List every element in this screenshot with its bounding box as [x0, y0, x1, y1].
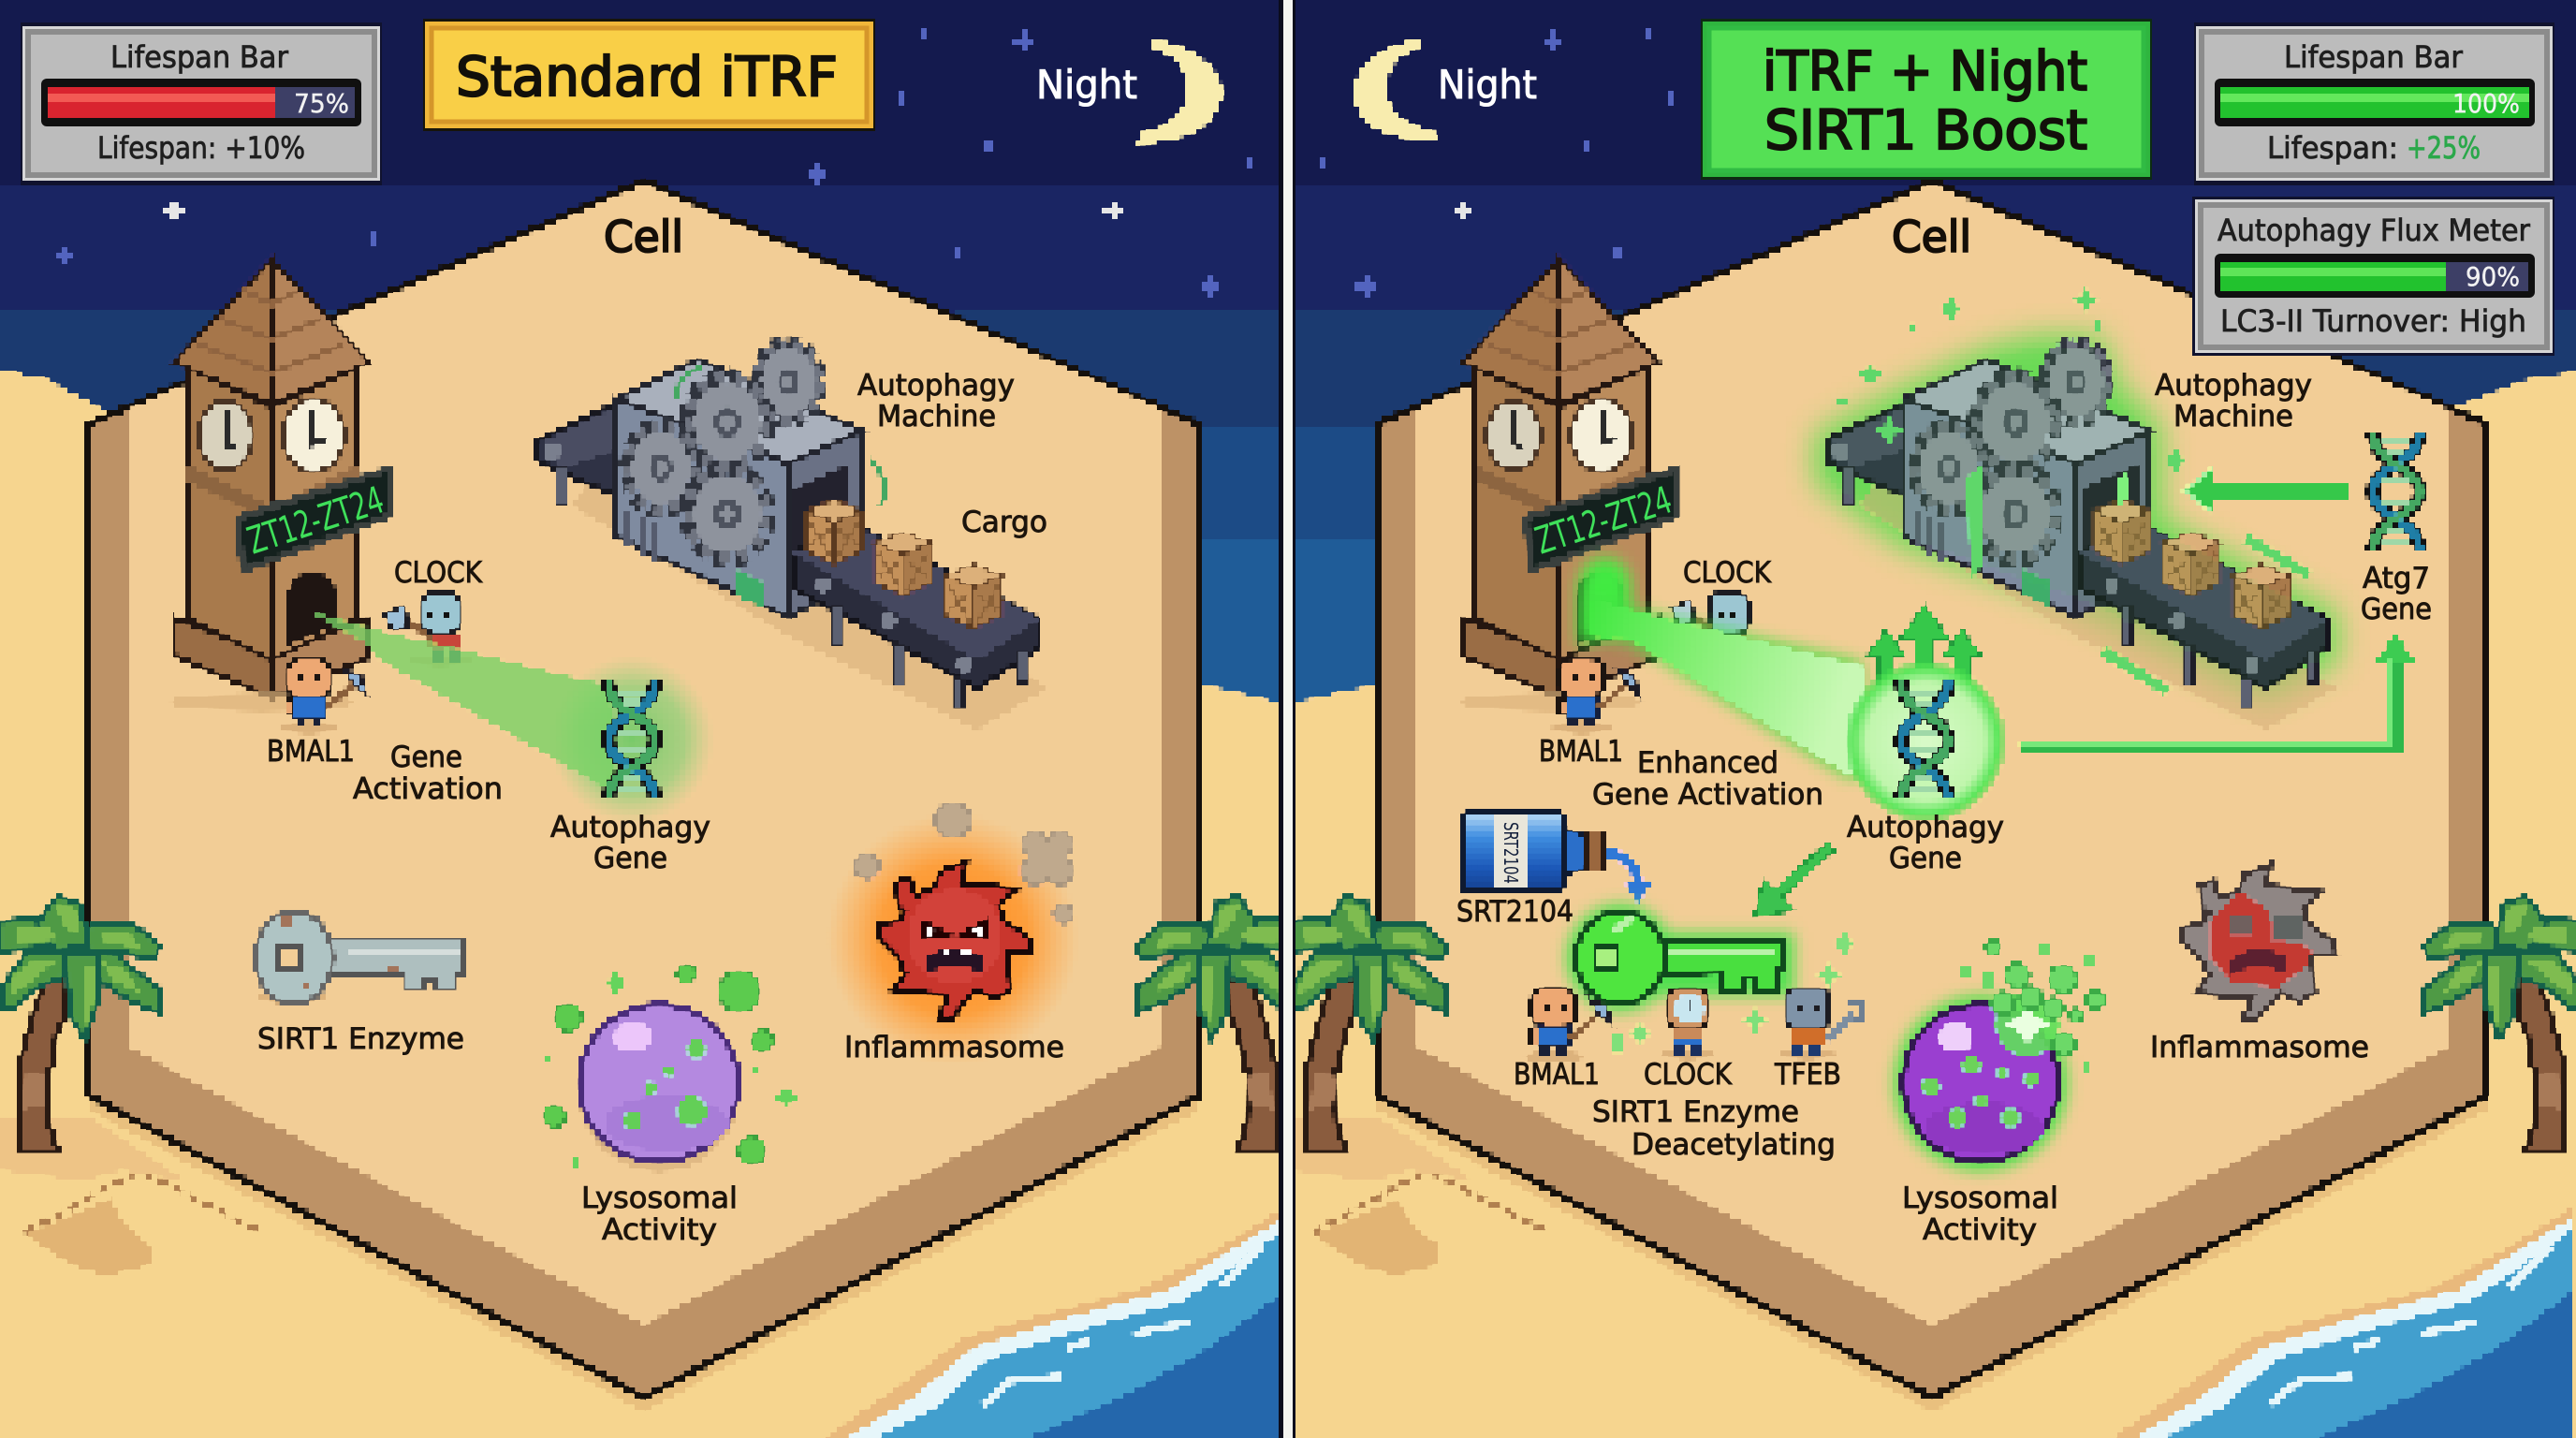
bottle label text: SRT2104	[1500, 822, 1522, 884]
icon: autophagy gene glow orb right	[1845, 661, 2006, 822]
heading: iTRF + Night SIRT1 Boost	[1701, 19, 2152, 180]
panel: lifespan bar left	[21, 22, 382, 185]
value: +25%: +25%	[2407, 130, 2481, 166]
icon: inflammasome glow left	[827, 813, 1079, 1065]
icon: autophagy machine right	[1826, 343, 2336, 730]
label: CLOCK lower: CLOCK	[1644, 1058, 1733, 1092]
icon: inflammasome right	[2181, 864, 2336, 1020]
label: Night right: Night	[1438, 62, 1537, 108]
icon: CLOCK worker lower	[1660, 989, 1716, 1060]
bar track left	[41, 79, 361, 126]
heading: iTRF + Night SIRT1 Boost: SIRT1 Boost	[1764, 98, 2087, 162]
heading: Standard iTRF: Standard iTRF	[456, 45, 838, 109]
label: flux meter: Autophagy Flux Meter	[2217, 213, 2531, 248]
icon: glowing door right	[1578, 558, 1631, 646]
icon: smoke puffs left	[855, 803, 1074, 923]
label: Atg7 Gene	[2361, 562, 2432, 626]
tower sign text right: ZT12-ZT24	[1530, 478, 1677, 564]
label: Inflammasome left: Inflammasome	[844, 1031, 1064, 1064]
icon: autophagy machine left	[538, 343, 1048, 730]
label: Gene Activation	[353, 741, 503, 806]
icon: palm left panel west	[0, 896, 160, 1152]
label: Atg7 Gene: Gene	[2361, 593, 2432, 626]
label: Autophagy Machine left: Machine	[877, 400, 996, 433]
icon: machine glow right	[1826, 346, 2327, 688]
sand details: left panel	[0, 1119, 263, 1276]
bar track right	[2215, 79, 2535, 126]
label: Gene Activation: Gene	[390, 741, 462, 774]
label: Autophagy Gene left: Autophagy	[550, 811, 710, 844]
label: Lysosomal Activity right: Activity	[1923, 1213, 2037, 1247]
icon: lysosome left	[543, 964, 799, 1172]
label: TFEB: TFEB	[1774, 1058, 1841, 1092]
arrow: gene to key	[1754, 843, 1835, 917]
label: BMAL1 lower: BMAL1	[1514, 1058, 1600, 1092]
icon: clock tower left	[168, 259, 390, 712]
label: Autophagy Gene left	[550, 811, 710, 875]
sparkles around key and workers	[1614, 931, 1857, 1053]
small green arrows on machine left	[676, 367, 886, 506]
icon: TFEB worker	[1779, 989, 1863, 1060]
label: BMAL1 left: BMAL1	[267, 735, 355, 769]
value: 90%: 90%	[2466, 261, 2520, 292]
label: BMAL1 right: BMAL1	[1539, 735, 1623, 769]
sparkles around machine right	[1838, 286, 2312, 696]
icon: CLOCK worker left	[384, 593, 472, 667]
icon: palm right panel east	[2423, 896, 2576, 1152]
icon: CLOCK worker right	[1672, 593, 1749, 647]
label: Autophagy Gene right: Autophagy	[1847, 811, 2004, 844]
label: CLOCK left: CLOCK	[394, 556, 483, 590]
machine green tint right	[1826, 346, 2327, 688]
label: Gene Activation: Activation	[353, 772, 503, 806]
label: SIRT1 Enzyme Deacetylating: SIRT1 Enzyme	[1592, 1095, 1799, 1129]
label: Lysosomal Activity right	[1902, 1181, 2058, 1247]
label: Cargo: Cargo	[961, 506, 1047, 539]
label: Night left: Night	[1036, 62, 1137, 108]
icon: inflammasome left	[877, 861, 1032, 1018]
label: Autophagy Gene left: Gene	[593, 842, 667, 875]
label: SRT2104: SRT2104	[1456, 895, 1573, 929]
label: lifespan bar: Lifespan Bar	[2284, 39, 2464, 75]
label: Cell left: Cell	[604, 212, 683, 262]
label: Autophagy Machine left	[857, 369, 1015, 433]
label: Autophagy Gene right: Gene	[1889, 842, 1962, 875]
icon: crescent moon left	[1137, 37, 1222, 144]
ocean corner: right panel	[2112, 1208, 2571, 1438]
label: SIRT1 Enzyme Deacetylating: Deacetylating	[1632, 1128, 1836, 1162]
value: lifespan +10%: Lifespan: +10%	[97, 130, 305, 166]
panel: right cell	[1377, 181, 2487, 1413]
icon: crescent moon right	[1354, 37, 1438, 140]
label: Lysosomal Activity left: Lysosomal	[581, 1181, 738, 1215]
beach sand: left panel	[0, 370, 1283, 1438]
label: Lysosomal Activity left: Activity	[602, 1213, 717, 1247]
ocean corner: left panel	[824, 1208, 1283, 1438]
stars: left panel	[56, 28, 1254, 296]
panel: left cell	[89, 181, 1199, 1413]
value: 75%: 75%	[294, 88, 349, 119]
label: Enhanced Gene Activation: Gene Activation	[1592, 778, 1823, 812]
icon: lysosome burst right	[1962, 940, 2105, 1075]
sand details: right panel	[1288, 1119, 1551, 1276]
flux bar	[2215, 254, 2535, 298]
icon: BMAL1 worker lower	[1524, 988, 1612, 1064]
arrow: Atg7 to machine	[2184, 468, 2350, 513]
icon: Atg7 DNA	[2373, 433, 2420, 550]
icon: palm right panel west	[1288, 896, 1448, 1152]
arrow: bottle to key	[1606, 852, 1653, 904]
icon: palm left panel east	[1135, 896, 1295, 1152]
stars: right panel	[1319, 28, 1674, 296]
icon: lysosome right	[1894, 995, 2068, 1171]
icon: DNA glow left	[549, 655, 714, 824]
label: Autophagy Machine left: Autophagy	[857, 369, 1015, 403]
value: lifespan: Lifespan:	[2267, 130, 2398, 166]
icon: SIRT1 key left	[256, 911, 464, 1005]
night sky and sea bands	[0, 0, 2576, 728]
arrows: up boost over gene	[1867, 605, 1981, 685]
label: Autophagy Machine right: Machine	[2174, 400, 2293, 433]
label: lifespan bar: Lifespan Bar	[110, 39, 289, 75]
label: Cell right: Cell	[1892, 212, 1971, 262]
icon: autophagy gene DNA left	[608, 682, 655, 800]
label: CLOCK right: CLOCK	[1683, 556, 1772, 590]
value: 100%: 100%	[2452, 88, 2520, 119]
label: SIRT1 Enzyme left: SIRT1 Enzyme	[257, 1022, 464, 1056]
icon: BMAL1 worker right	[1552, 658, 1640, 734]
label: Inflammasome right: Inflammasome	[2150, 1031, 2369, 1064]
icon: BMAL1 worker left	[279, 658, 367, 734]
label: Atg7 Gene: Atg7	[2363, 562, 2430, 595]
tower sign text left: ZT12-ZT24	[242, 478, 389, 564]
label: Autophagy Machine right: Autophagy	[2155, 369, 2312, 403]
label: Lysosomal Activity left	[581, 1181, 738, 1247]
divider between panels	[1279, 0, 1295, 1438]
label: Lysosomal Activity right: Lysosomal	[1902, 1181, 2058, 1215]
arrow: enhanced gene activation beam right	[1591, 599, 1867, 779]
arrow: gene activation beam left	[309, 611, 618, 796]
label: Enhanced Gene Activation	[1592, 746, 1823, 812]
arrow: gene to Atg7	[2019, 633, 2416, 748]
label: Autophagy Machine right	[2155, 369, 2312, 433]
icon: glowing SIRT1 key	[1566, 903, 1794, 1012]
heading: Standard iTRF	[423, 19, 875, 131]
label: Autophagy Gene right	[1847, 811, 2004, 875]
icon: autophagy gene DNA right	[1901, 682, 1948, 800]
label: Enhanced Gene Activation: Enhanced	[1637, 746, 1778, 780]
heading: iTRF + Night SIRT1 Boost: iTRF + Night	[1763, 39, 2087, 103]
icon: SRT2104 bottle	[1462, 813, 1604, 891]
panel: autophagy flux meter	[2192, 197, 2554, 356]
icon: clock tower right	[1456, 259, 1678, 712]
value: LC3-II turnover: LC3-II Turnover: High	[2220, 303, 2526, 339]
label: SIRT1 Enzyme Deacetylating	[1592, 1095, 1836, 1162]
beach sand: right panel	[1288, 372, 2576, 1438]
panel: lifespan bar right	[2194, 22, 2554, 185]
